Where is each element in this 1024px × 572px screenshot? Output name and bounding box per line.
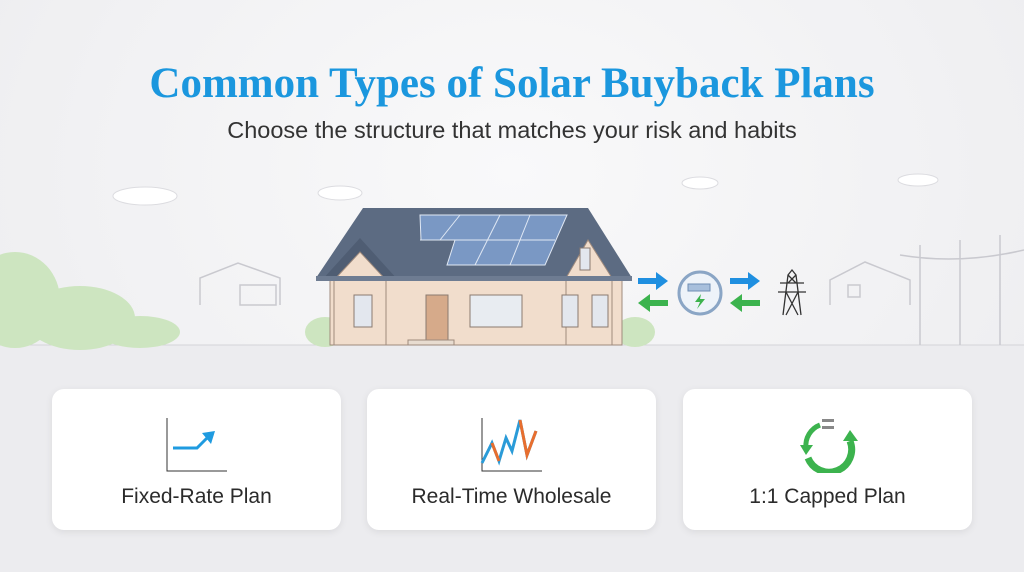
card: fixed-rate bbox=[52, 389, 341, 530]
clouds bbox=[113, 174, 938, 205]
background houses bbox=[200, 235, 1024, 345]
solar panels bbox=[420, 215, 567, 265]
main house bbox=[316, 208, 632, 345]
bushes left bbox=[0, 252, 655, 350]
arrows and meter bbox=[638, 272, 760, 314]
title: Common Types of Solar Buyback Plans bbox=[149, 60, 875, 107]
icon: volatile line chart bbox=[480, 418, 542, 472]
icon: cycle arrows bbox=[800, 419, 858, 473]
card: fixed-rate: Fixed-Rate Plan bbox=[121, 485, 272, 508]
card: 1:1 capped: 1:1 Capped Plan bbox=[749, 485, 906, 508]
icon: flat line chart bbox=[166, 418, 227, 472]
ground bbox=[0, 345, 1024, 572]
card: real-time wholesale bbox=[367, 389, 656, 530]
card: 1:1 capped bbox=[683, 389, 972, 530]
transmission tower bbox=[778, 270, 806, 315]
card: real-time wholesale: Real-Time Wholesale bbox=[412, 485, 611, 508]
subtitle: Choose the structure that matches your risk and habits bbox=[227, 117, 797, 143]
